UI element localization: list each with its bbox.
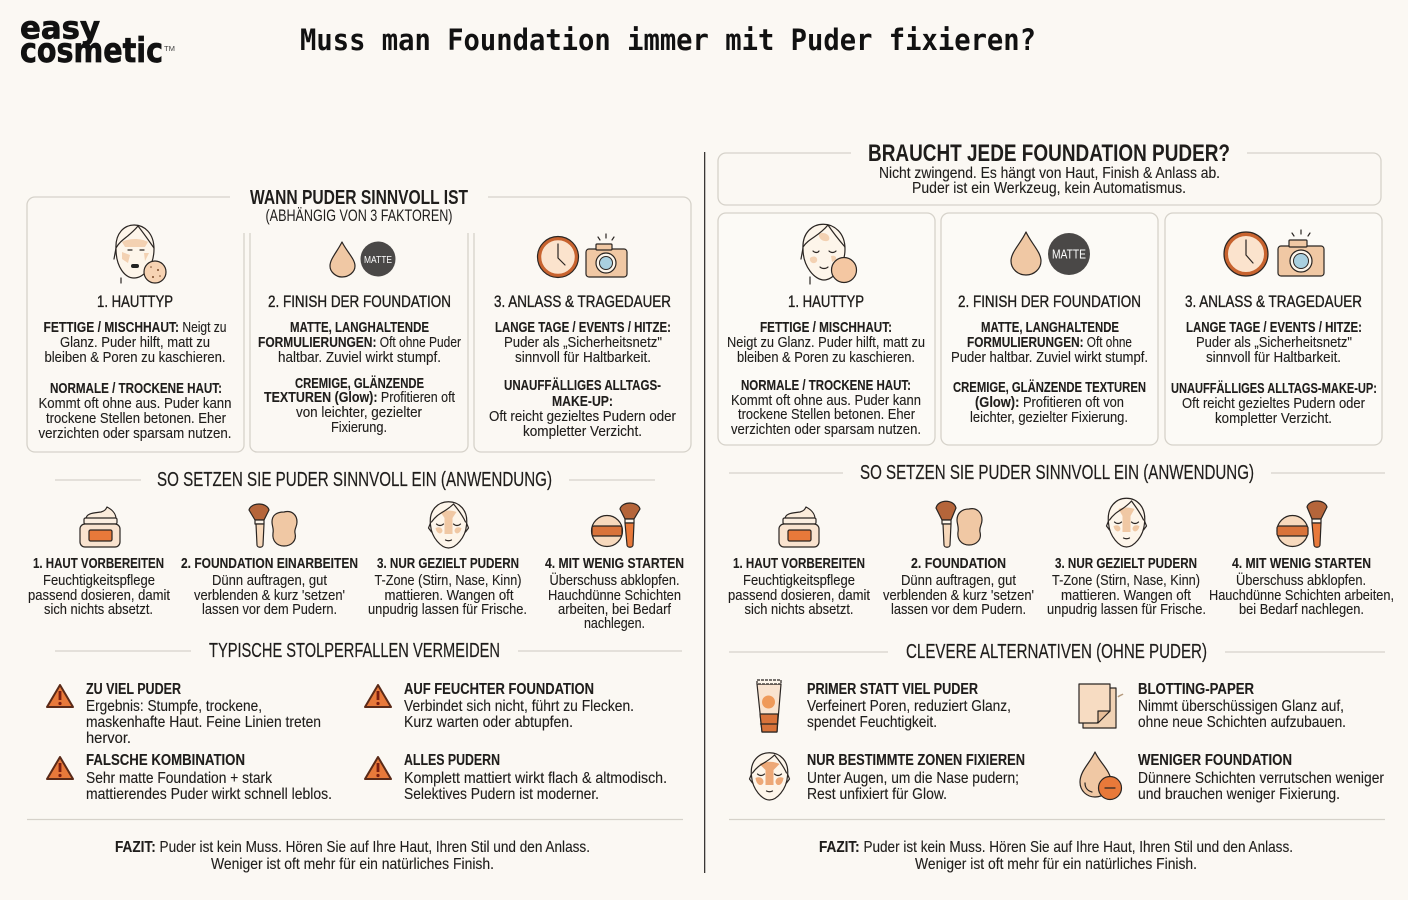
text block: step 4 [1209, 556, 1394, 618]
text block: hauttyp: trockene Stellen betonen. Eher [738, 406, 915, 423]
text block: zonen [807, 752, 1025, 803]
text block: zonen: NUR BESTIMMTE ZONEN FIXIEREN [807, 752, 1025, 769]
text block: hauttyp: FETTIGE / MISCHHAUT: [760, 320, 892, 336]
panel: intro box [718, 140, 1381, 205]
heading: wann puder sinnvoll ist [250, 187, 468, 225]
text block: hauttyp: bleiben & Poren zu kaschieren. [44, 349, 226, 366]
text block: step 2: verblenden & kurz 'setzen' [883, 587, 1034, 604]
text block: falsche kombination: FALSCHE KOMBINATION [86, 752, 245, 769]
text block: step 2: 2. FOUNDATION EINARBEITEN [181, 556, 358, 572]
text block: anlass: Oft reicht gezieltes Pudern oder [1182, 395, 1365, 412]
text block: anlass: Puder als „Sicherheitsnetz" [504, 334, 662, 351]
text block: zu viel puder: Ergebnis: Stumpfe, trockene, [86, 698, 262, 715]
icon: face t-zone [428, 502, 468, 548]
text block: zu viel puder: hervor. [86, 730, 131, 747]
text block: anlass: sinnvoll für Haltbarkeit. [515, 349, 651, 366]
text block: step 1 [728, 556, 871, 618]
icon: brush and sponge [249, 504, 297, 547]
text block: hauttyp: NORMALE / TROCKENE HAUT: [741, 378, 911, 394]
heading: anwendung: SO SETZEN SIE PUDER SINNVOLL EIN (ANWENDUNG) [860, 462, 1254, 484]
text block: hauttyp [38, 293, 232, 442]
text block: hauttyp: 1. HAUTTYP [788, 293, 864, 311]
text block: step 3: 3. NUR GEZIELT PUDERN [377, 556, 519, 572]
text block: step 1: sich nichts absetzt. [744, 601, 854, 618]
text block: finish: 2. FINISH DER FOUNDATION [268, 293, 451, 311]
text block: primer: Verfeinert Poren, reduziert Glanz, [807, 698, 1011, 715]
text block: anlass [1171, 293, 1377, 427]
text block: finish: (Glow): Profitieren oft von [975, 394, 1124, 411]
panel: right column [718, 140, 1394, 873]
text block: step 1: sich nichts absetzt. [44, 601, 153, 618]
text block: step 4: Überschuss abklopfen. [1236, 571, 1366, 589]
text block: finish: 2. FINISH DER FOUNDATION [958, 293, 1141, 311]
text block: step 3 [368, 556, 527, 618]
text block: hauttyp: verzichten oder sparsam nutzen. [731, 421, 921, 438]
text block: zonen: Rest unfixiert für Glow. [807, 786, 947, 803]
text block: falsche kombination: Sehr matte Foundation + stark [86, 770, 273, 787]
text block: finish: MATTE, LANGHALTENDE [290, 320, 429, 336]
text block: step 3: 3. NUR GEZIELT PUDERN [1055, 556, 1197, 572]
text block: step 2 [883, 556, 1034, 618]
text block: anlass: sinnvoll für Haltbarkeit. [1206, 349, 1341, 366]
text block: alles pudern: Komplett mattiert wirkt flach & altmodisch. [404, 770, 667, 787]
text block: anlass: UNAUFFÄLLIGES ALLTAGS- [504, 377, 661, 394]
text block: finish: FORMULIERUNGEN: Oft ohne Puder [258, 334, 461, 351]
title: Muss man Foundation immer mit Puder fixieren? [300, 23, 1036, 57]
icon: drop and matte badge: MATTE [364, 254, 392, 266]
text block: finish [951, 293, 1148, 426]
text block: finish: Fixierung. [331, 419, 387, 436]
text block: step 4: nachlegen. [584, 615, 645, 632]
text block: zu viel puder: ZU VIEL PUDER [86, 681, 181, 698]
panel: wann puder sinnvoll ist [27, 187, 691, 452]
text block: finish: von leichter, gezielter [296, 404, 422, 421]
text block: anlass: Puder als „Sicherheitsnetz" [1196, 334, 1352, 351]
text block: hauttyp [727, 293, 925, 438]
text block: step 3: T-Zone (Stirn, Nase, Kinn) [1052, 572, 1200, 589]
text block: blotting: ohne neue Schichten aufzubauen. [1138, 714, 1346, 731]
icon: face zones [750, 753, 790, 800]
heading: braucht jede foundation puder: BRAUCHT JEDE FOUNDATION PUDER? [868, 140, 1230, 167]
text block: fazit right [819, 839, 1293, 873]
text block: alles pudern [404, 752, 667, 803]
text block: step 4: arbeiten, bei Bedarf [558, 601, 672, 618]
text block: hauttyp: Glanz. Puder hilft, matt zu [60, 334, 210, 351]
text block: zu viel puder [86, 681, 321, 747]
text block: fazit left: FAZIT: Puder ist kein Muss. Hören Sie auf Ihre Haut, Ihren Stil und den Anlass. [115, 839, 590, 856]
text block: fazit left [115, 839, 590, 873]
logo: TM [164, 46, 175, 53]
text block: step 4: Überschuss abklopfen. [550, 571, 680, 589]
text block: step 2: Dünn auftragen, gut [901, 572, 1017, 589]
icon: blotting paper [1079, 684, 1123, 728]
text block: step 4: Hauchdünne Schichten [548, 587, 681, 604]
icon: drop with minus [1080, 752, 1122, 800]
logo [20, 10, 175, 71]
text block: fazit right: FAZIT: Puder ist kein Muss. Hören Sie auf Ihre Haut, Ihren Stil und den Anlass. [819, 839, 1293, 856]
text block: blotting [1138, 681, 1346, 731]
icon: cream jar [80, 507, 120, 547]
text block: fazit left: Weniger ist oft mehr für ein natürliches Finish. [211, 856, 494, 873]
text block: step 1: Feuchtigkeitspflege [743, 572, 855, 589]
text block: hauttyp: 1. HAUTTYP [97, 293, 173, 311]
text block: step 3 [1047, 556, 1206, 618]
text block: step 3: unpudrig lassen für Frische. [1047, 601, 1206, 618]
icon: puff and brush [1277, 501, 1327, 547]
text block: step 4: bei Bedarf nachlegen. [1239, 601, 1364, 618]
text block: anlass: Oft reicht gezieltes Pudern oder [489, 408, 676, 425]
panel: factor cards [718, 213, 1382, 445]
text block: hauttyp: NORMALE / TROCKENE HAUT: [50, 381, 222, 397]
text block: falsche kombination: mattierendes Puder wirkt schnell leblos. [86, 786, 332, 803]
icon: drop and matte badge: MATTE [1052, 248, 1086, 262]
icon: warning 4 [365, 757, 391, 779]
text block: finish [258, 293, 461, 436]
text block: primer: spendet Feuchtigkeit. [807, 714, 937, 731]
text block: anlass: LANGE TAGE / EVENTS / HITZE: [1186, 320, 1362, 336]
text block: weniger foundation: WENIGER FOUNDATION [1138, 752, 1292, 769]
text block: zu viel puder: maskenhafte Haut. Feine Linien treten [86, 714, 321, 731]
text block: finish: Puder haltbar. Zuviel wirkt stumpf. [951, 349, 1148, 366]
icon: drop and matte badge [330, 242, 396, 277]
text block: weniger foundation [1138, 752, 1385, 803]
text block: finish: FORMULIERUNGEN: Oft ohne [967, 334, 1132, 351]
heading: stolperfallen: TYPISCHE STOLPERFALLEN VERMEIDEN [209, 640, 500, 662]
icon: warning 3 [365, 685, 391, 707]
text block: hauttyp: Neigt zu Glanz. Puder hilft, matt zu [727, 334, 925, 351]
text block: step 3: mattieren. Wangen oft [1061, 587, 1192, 604]
text block: hauttyp: bleiben & Poren zu kaschieren. [737, 349, 915, 366]
icon: face with pores [114, 225, 166, 283]
icon: clock and camera [1224, 230, 1324, 276]
heading: wann puder sinnvoll ist: (ABHÄNGIG VON 3 FAKTOREN) [266, 207, 452, 225]
text block: finish: leichter, gezielter Fixierung. [970, 409, 1128, 426]
heading: wann puder sinnvoll ist: WANN PUDER SINNVOLL IST [250, 187, 468, 209]
text block: intro: Puder ist ein Werkzeug, kein Automatismus. [912, 180, 1186, 197]
text block: step 2: Dünn auftragen, gut [212, 572, 328, 589]
text block: anlass: 3. ANLASS & TRAGEDAUER [1185, 293, 1362, 311]
icon: primer tube [757, 680, 781, 732]
text block: finish: haltbar. Zuviel wirkt stumpf. [278, 349, 441, 366]
center divider [704, 152, 705, 873]
text block: hauttyp: FETTIGE / MISCHHAUT: Neigt zu [44, 319, 226, 336]
text block: finish: MATTE, LANGHALTENDE [981, 320, 1119, 336]
text block: blotting: BLOTTING-PAPER [1138, 681, 1254, 698]
text block: blotting: Nimmt überschüssigen Glanz auf, [1138, 698, 1344, 715]
text block: step 1: 1. HAUT VORBEREITEN [33, 556, 164, 572]
text block: alles pudern: Selektives Pudern ist moderner. [404, 786, 599, 803]
text block: anlass: LANGE TAGE / EVENTS / HITZE: [495, 320, 671, 336]
panel: left column [27, 187, 691, 873]
text block: falsche kombination [86, 752, 332, 803]
text block: hauttyp: Kommt oft ohne aus. Puder kann [38, 395, 232, 412]
text block: primer [807, 681, 1011, 731]
text block: step 1: passend dosieren, damit [728, 587, 871, 604]
text block: step 2: verblenden & kurz 'setzen' [194, 587, 345, 604]
icon: cream jar [779, 507, 819, 547]
text block: finish: CREMIGE, GLÄNZENDE [295, 375, 424, 392]
text block: anlass: kompletter Verzicht. [523, 423, 642, 440]
text block: step 4: 4. MIT WENIG STARTEN [1232, 556, 1371, 572]
text block: intro: Nicht zwingend. Es hängt von Haut, Finish & Anlass ab. [879, 165, 1220, 182]
text block: alles pudern: ALLES PUDERN [404, 752, 500, 769]
icon: drop and matte badge [1011, 232, 1090, 275]
heading: anwendung: SO SETZEN SIE PUDER SINNVOLL EIN (ANWENDUNG) [157, 469, 552, 491]
text block: step 1 [28, 556, 171, 618]
icon: warning 2 [47, 757, 73, 779]
text block: step 4: 4. MIT WENIG STARTEN [545, 556, 684, 572]
heading: alternativen: CLEVERE ALTERNATIVEN (OHNE PUDER) [906, 641, 1207, 663]
text block: anlass: MAKE-UP: [552, 394, 613, 410]
text block: hauttyp: trockene Stellen betonen. Eher [46, 410, 226, 427]
text block: anlass [489, 293, 676, 440]
text block: finish: CREMIGE, GLÄNZENDE TEXTUREN [953, 379, 1146, 396]
text block: step 3: T-Zone (Stirn, Nase, Kinn) [374, 572, 522, 589]
text block: step 3: mattieren. Wangen oft [384, 587, 514, 604]
text block: finish: TEXTUREN (Glow): Profitieren oft [264, 389, 456, 406]
text block: step 4 [545, 556, 684, 632]
text block: step 3: unpudrig lassen für Frische. [368, 601, 527, 618]
text block: step 2: 2. FOUNDATION [911, 556, 1006, 572]
text block: anlass: kompletter Verzicht. [1215, 410, 1332, 427]
text block: weniger foundation: und brauchen weniger Fixierung. [1138, 786, 1340, 803]
text block: zonen: Unter Augen, um die Nase pudern; [807, 770, 1019, 787]
text block: anlass: 3. ANLASS & TRAGEDAUER [494, 293, 671, 311]
icon: puff and brush [592, 503, 640, 547]
text block: auf feuchter foundation: Kurz warten oder abtupfen. [404, 714, 573, 731]
logo: cosmetic [20, 31, 163, 71]
text block: step 2: lassen vor dem Pudern. [891, 601, 1026, 618]
logo: easy [20, 10, 100, 46]
text block: step 2: lassen vor dem Pudern. [202, 601, 337, 618]
icon: clock and camera [538, 234, 627, 278]
text block: step 1: Feuchtigkeitspflege [43, 572, 155, 589]
text block: hauttyp: verzichten oder sparsam nutzen. [38, 425, 232, 442]
text block: fazit right: Weniger ist oft mehr für ein natürliches Finish. [915, 856, 1197, 873]
icon: face t-zone [1106, 498, 1146, 547]
text block: primer: PRIMER STATT VIEL PUDER [807, 681, 978, 698]
text block: intro [879, 165, 1220, 197]
text block: auf feuchter foundation: Verbindet sich nicht, führt zu Flecken. [404, 698, 634, 715]
text block: step 1: 1. HAUT VORBEREITEN [733, 556, 865, 572]
text block: hauttyp: Kommt oft ohne aus. Puder kann [731, 392, 921, 409]
icon: brush and sponge [936, 501, 982, 547]
text block: step 1: passend dosieren, damit [28, 587, 171, 604]
text block: auf feuchter foundation: AUF FEUCHTER FOUNDATION [404, 681, 594, 698]
icon: face with pad [801, 224, 856, 284]
text block: auf feuchter foundation [404, 681, 634, 731]
text block: step 2 [181, 556, 358, 618]
icon: warning 1 [47, 685, 73, 707]
